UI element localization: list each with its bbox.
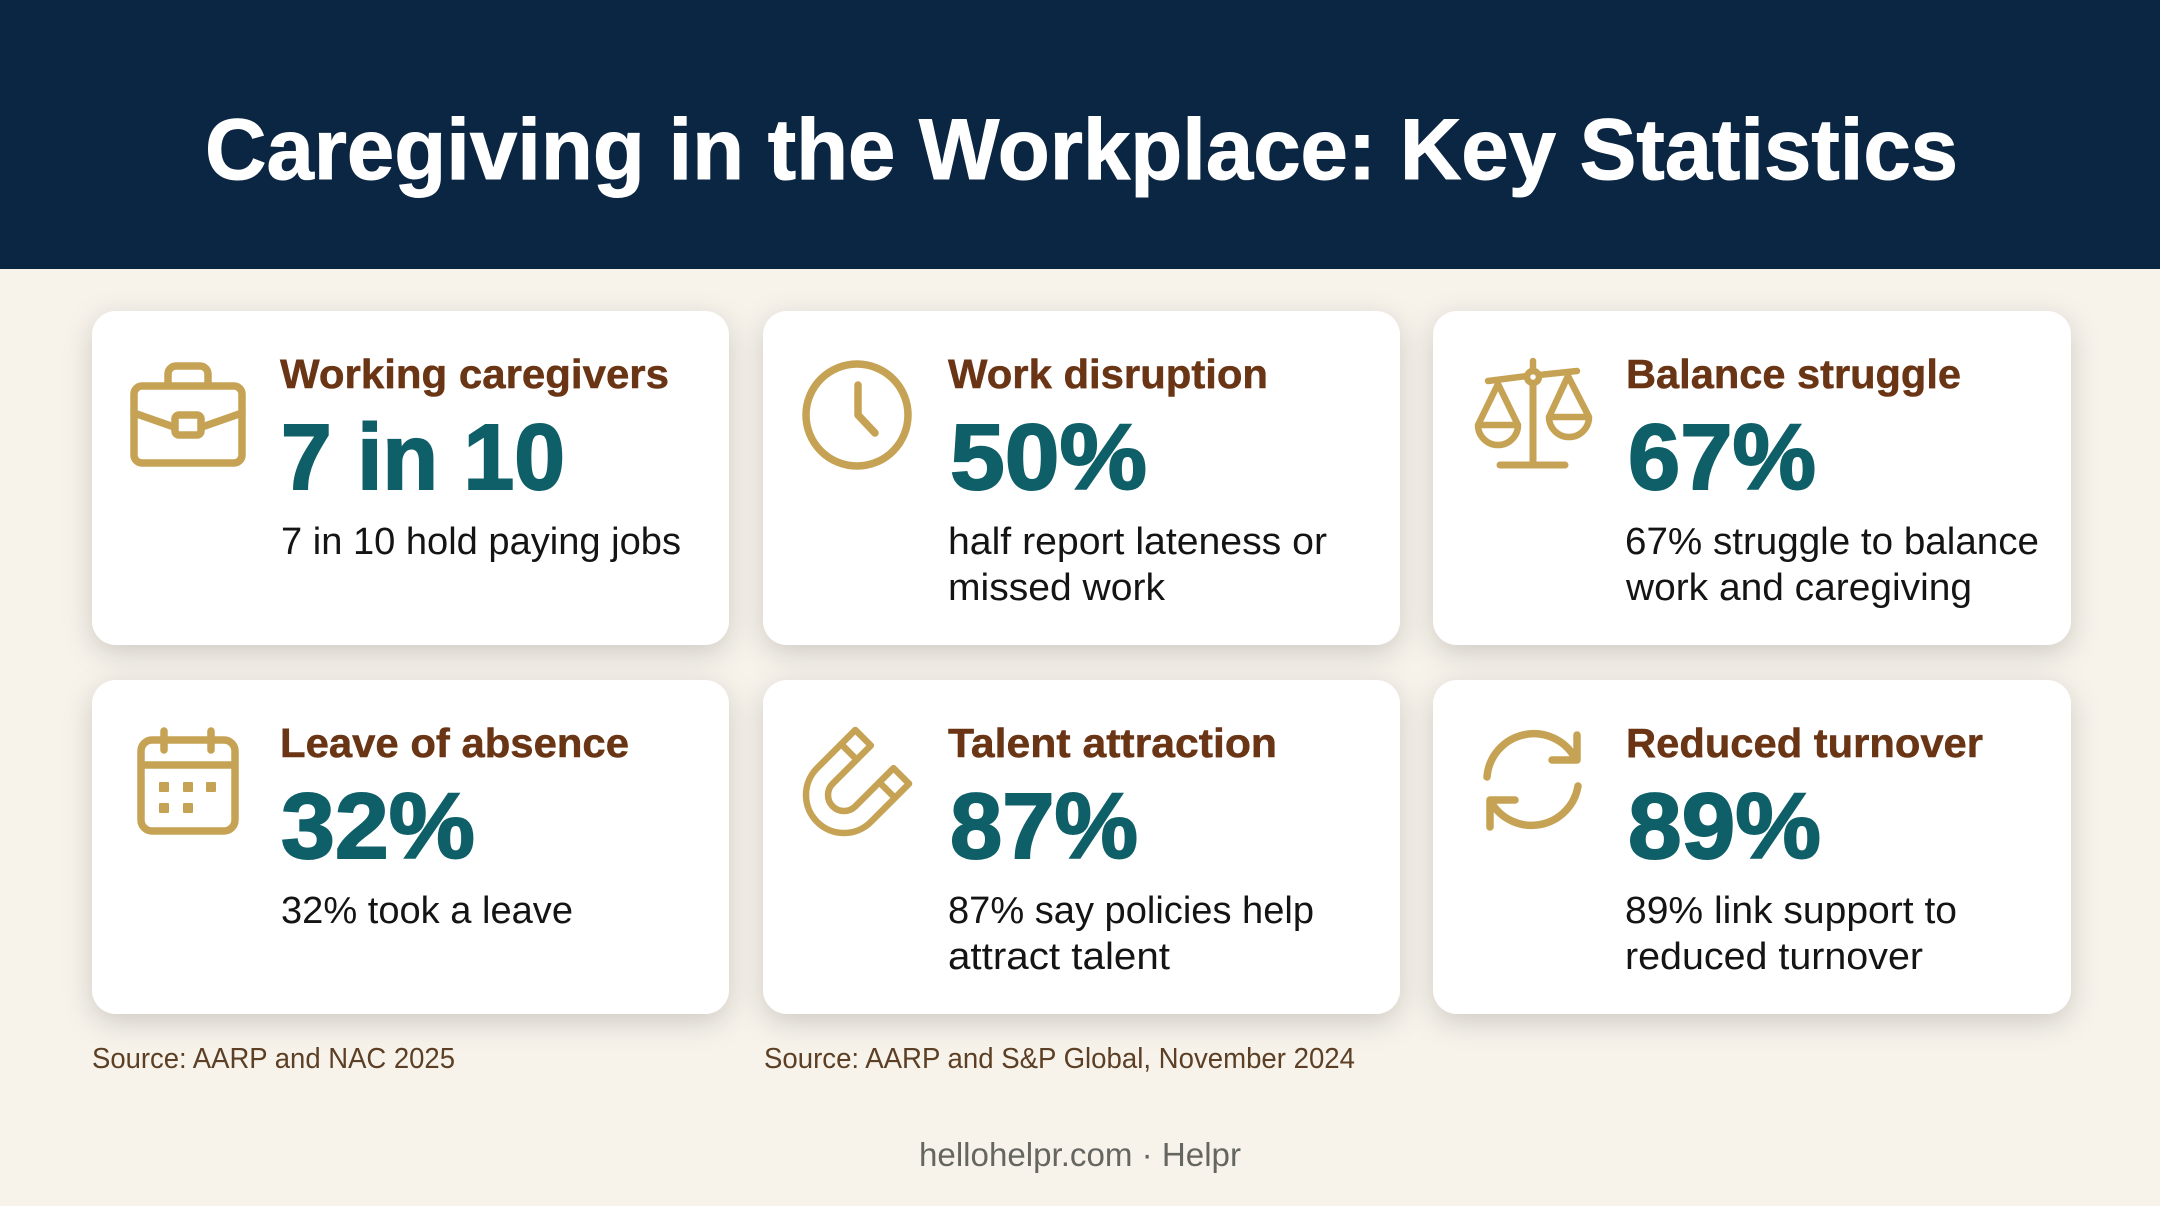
panel: leave of absence: [92, 680, 729, 1014]
description: 7 in 10 hold paying jobs: [281, 521, 681, 563]
icon: refresh arrows: [1487, 734, 1578, 827]
description: half report lateness or: [948, 521, 1327, 563]
label: Balance struggle: [1626, 351, 1961, 397]
label: Working caregivers: [280, 351, 669, 397]
title: Caregiving in the Workplace: Key Statistics: [205, 102, 1958, 198]
stat: 7 in 10: [281, 405, 565, 509]
panel: working caregivers: [92, 311, 729, 645]
panel: work disruption: [763, 311, 1400, 645]
stat: 89%: [1628, 774, 1821, 878]
header banner: [0, 0, 2160, 269]
label: Work disruption: [948, 351, 1268, 397]
description: reduced turnover: [1625, 936, 1923, 978]
icon: calendar: [141, 731, 235, 831]
label: Leave of absence: [280, 720, 629, 766]
description: missed work: [948, 567, 1166, 609]
panel: talent attraction: [763, 680, 1400, 1014]
icon: briefcase: [134, 366, 242, 463]
description: [1625, 890, 1957, 978]
description: 89% link support to: [1625, 890, 1957, 932]
icon: clock: [806, 364, 908, 466]
stat: 87%: [950, 774, 1138, 878]
description: [1625, 521, 2039, 609]
description: 67% struggle to balance: [1625, 521, 2039, 563]
stat: 50%: [950, 405, 1147, 509]
source: AARP and NAC: Source: AARP and NAC 2025: [92, 1043, 455, 1075]
description: attract talent: [948, 936, 1170, 978]
description: [948, 890, 1314, 978]
label: Talent attraction: [948, 720, 1277, 766]
panel: reduced turnover: [1433, 680, 2071, 1014]
icon: scales: [1478, 361, 1589, 465]
description: work and caregiving: [1625, 567, 1972, 609]
description: 32% took a leave: [281, 890, 573, 932]
source: AARP and S&P Global: Source: AARP and S&P Global, November 2024: [764, 1043, 1355, 1075]
label: Reduced turnover: [1626, 720, 1983, 766]
stat: 32%: [281, 774, 475, 878]
description: 87% say policies help: [948, 890, 1314, 932]
panel: balance struggle: [1433, 311, 2071, 645]
description: [948, 521, 1327, 609]
stat: 67%: [1628, 405, 1816, 509]
icon: magnet: [790, 730, 909, 849]
footer: hellohelpr.com · Helpr: [919, 1136, 1241, 1173]
